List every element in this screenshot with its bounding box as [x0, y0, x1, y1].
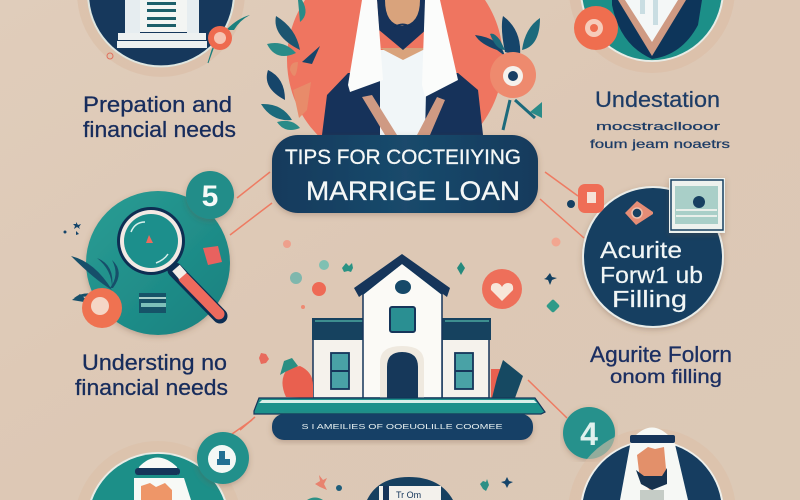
icon: heart badge [482, 269, 522, 309]
text block: form filling label [590, 342, 732, 388]
panel: top-right man circle [570, 0, 734, 73]
text block: financial needs label [75, 350, 228, 400]
icon: coral square badge [578, 184, 604, 213]
heading: circle text: Filling [612, 286, 687, 312]
connector lines [230, 172, 584, 434]
heading: circle text [600, 237, 703, 312]
icon: coral hexagon [625, 201, 653, 225]
heading: MARRIGE LOAN [306, 176, 520, 206]
icon: coral badge [82, 288, 122, 328]
icon: form document [669, 178, 725, 233]
text block: preparation label [83, 92, 236, 142]
icon: bank building [117, 0, 207, 48]
text block: form filling label: Agurite Folorn [590, 342, 732, 367]
heading: circle text: Acurite [600, 237, 682, 263]
icon: teal number badge bottom right [563, 407, 615, 459]
icon: small card [139, 293, 166, 313]
icon: number badge: 5 [202, 180, 218, 213]
icon: small sparkles [64, 222, 81, 235]
panel: bottom-left man circle [78, 432, 249, 500]
text block: understanding label [590, 87, 730, 151]
decorations near bottom [307, 475, 513, 500]
icon: coral flower badge [208, 15, 250, 63]
icon: man figure [322, 0, 483, 135]
icon: coral badge [574, 6, 618, 50]
text block: preparation label: financial needs [83, 117, 236, 142]
icon: left foliage [261, 0, 320, 130]
text block: financial needs label: Understing no [82, 350, 227, 375]
text block: financial needs label: financial needs [75, 375, 228, 400]
icon: right foliage with flower [475, 16, 542, 130]
icon: coral tag [203, 246, 222, 265]
heading [285, 146, 521, 206]
panel: bottom-right man circle [569, 428, 735, 500]
heading: TIPS FOR COCTEIIYING [285, 146, 521, 169]
icon: teal number badge [197, 432, 249, 484]
text block: understanding label: mocstracllooor [596, 121, 721, 133]
icon: house: S I AMEILIES OF OOEUOLILLE COOMEE [302, 424, 503, 431]
text block: form filling label: onom filling [610, 367, 722, 388]
icon: number badge [186, 171, 234, 219]
panel: top-left bank circle [77, 0, 250, 77]
scattered decorations right [544, 238, 560, 313]
icon: house [254, 254, 545, 440]
icon: man with keffiyeh [620, 428, 688, 500]
panel: bottom-centre document circle [367, 477, 453, 500]
icon: shirt and collar [618, 0, 686, 56]
panel: central man portrait [261, 0, 542, 168]
icon: foliage [71, 256, 119, 303]
title banner [272, 135, 538, 213]
text block: preparation label: Prepation and [83, 92, 232, 117]
icon: document: Tr Om [396, 490, 421, 500]
icon: teal number badge bottom right: 4 [580, 416, 598, 452]
scattered decorations [259, 240, 465, 364]
icon: man with keffiyeh [134, 458, 191, 500]
icon: magnifying glass [117, 207, 220, 316]
text block: understanding label: foum jeam noaetrs [590, 137, 730, 151]
heading: circle text: Forw1 ub [600, 262, 703, 288]
text block: understanding label: Undestation [595, 87, 720, 112]
panel: accurate form filling circle [567, 178, 725, 328]
panel: magnifier circle [71, 171, 234, 335]
